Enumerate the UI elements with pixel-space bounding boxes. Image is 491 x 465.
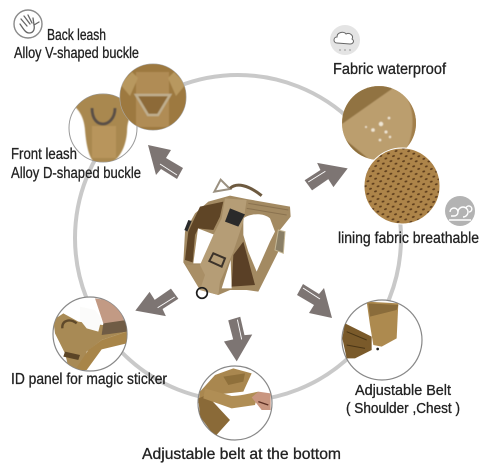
icon: hand <box>14 10 42 38</box>
photo: waterproof fabric <box>342 86 418 160</box>
label: adjustable belt: Adjustable Belt <box>355 383 451 399</box>
label: front leash: Front leash <box>11 146 77 163</box>
label: adjustable belt <box>346 383 460 417</box>
photo: bottom belt <box>198 366 272 440</box>
arrow: to adjustable belt <box>297 284 332 318</box>
photo: ID panel <box>53 297 127 371</box>
background ring <box>75 75 401 401</box>
icon: cloud <box>330 25 360 55</box>
label: back leash: Back leash <box>47 27 106 44</box>
label: front leash <box>11 146 141 182</box>
label: front leash: Alloy D-shaped buckle <box>11 165 141 182</box>
label: adjustable belt: ( Shoulder ,Chest ) <box>346 401 460 417</box>
arrow: to bottom belt <box>212 313 261 361</box>
photo: D-shaped buckle <box>69 94 137 162</box>
photo: adjustable belt <box>342 300 422 380</box>
photo: breathable mesh <box>364 148 440 224</box>
label: fabric waterproof: Fabric waterproof <box>333 61 447 78</box>
label: back leash <box>14 27 139 62</box>
arrow: to front leash <box>148 145 183 179</box>
photo: V-shaped buckle <box>120 64 186 130</box>
label: back leash: Alloy V-shaped buckle <box>14 45 139 62</box>
label: bottom belt: Adjustable belt at the bottom <box>142 446 341 463</box>
arrow: to ID panel <box>135 279 181 325</box>
icon: wind swirl <box>445 196 475 226</box>
arrow: to fabric <box>302 154 348 200</box>
label: ID panel: ID panel for magic sticker <box>11 371 168 388</box>
harness <box>183 180 291 298</box>
label: lining fabric breathable: lining fabric breathable <box>338 230 479 247</box>
